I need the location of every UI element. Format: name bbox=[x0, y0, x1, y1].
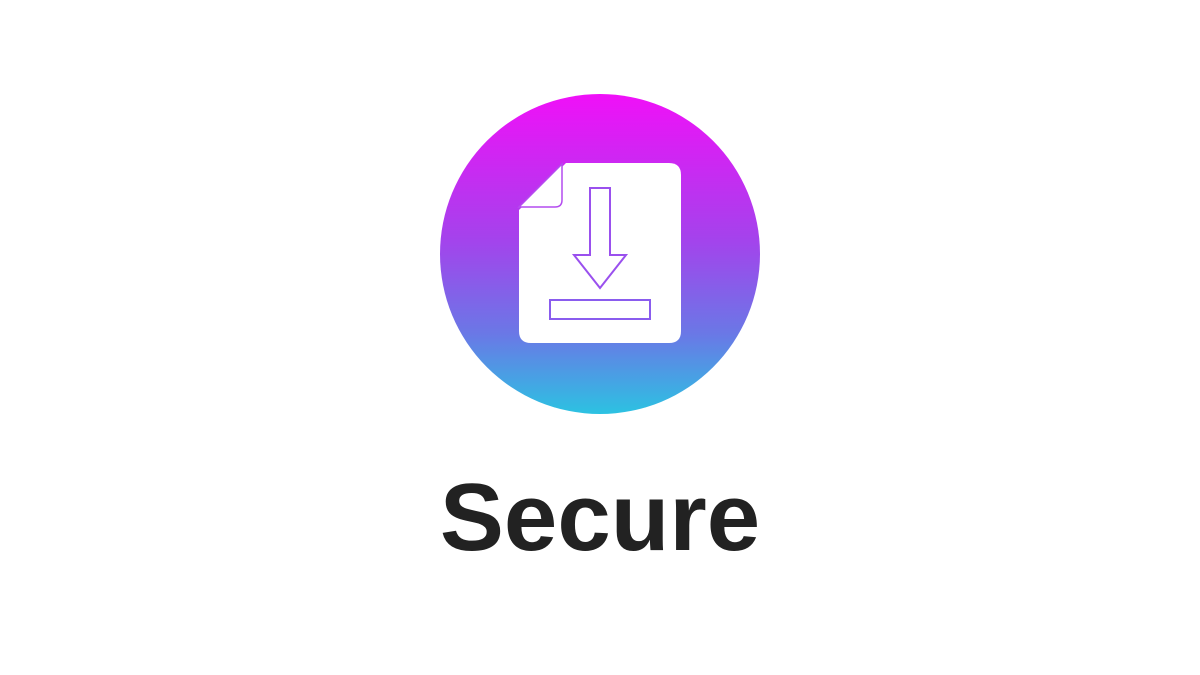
document bbox=[519, 163, 681, 343]
title: Secure bbox=[440, 464, 760, 571]
gradient circle bbox=[440, 94, 760, 414]
arrow bbox=[574, 188, 626, 288]
bar bbox=[550, 300, 650, 319]
